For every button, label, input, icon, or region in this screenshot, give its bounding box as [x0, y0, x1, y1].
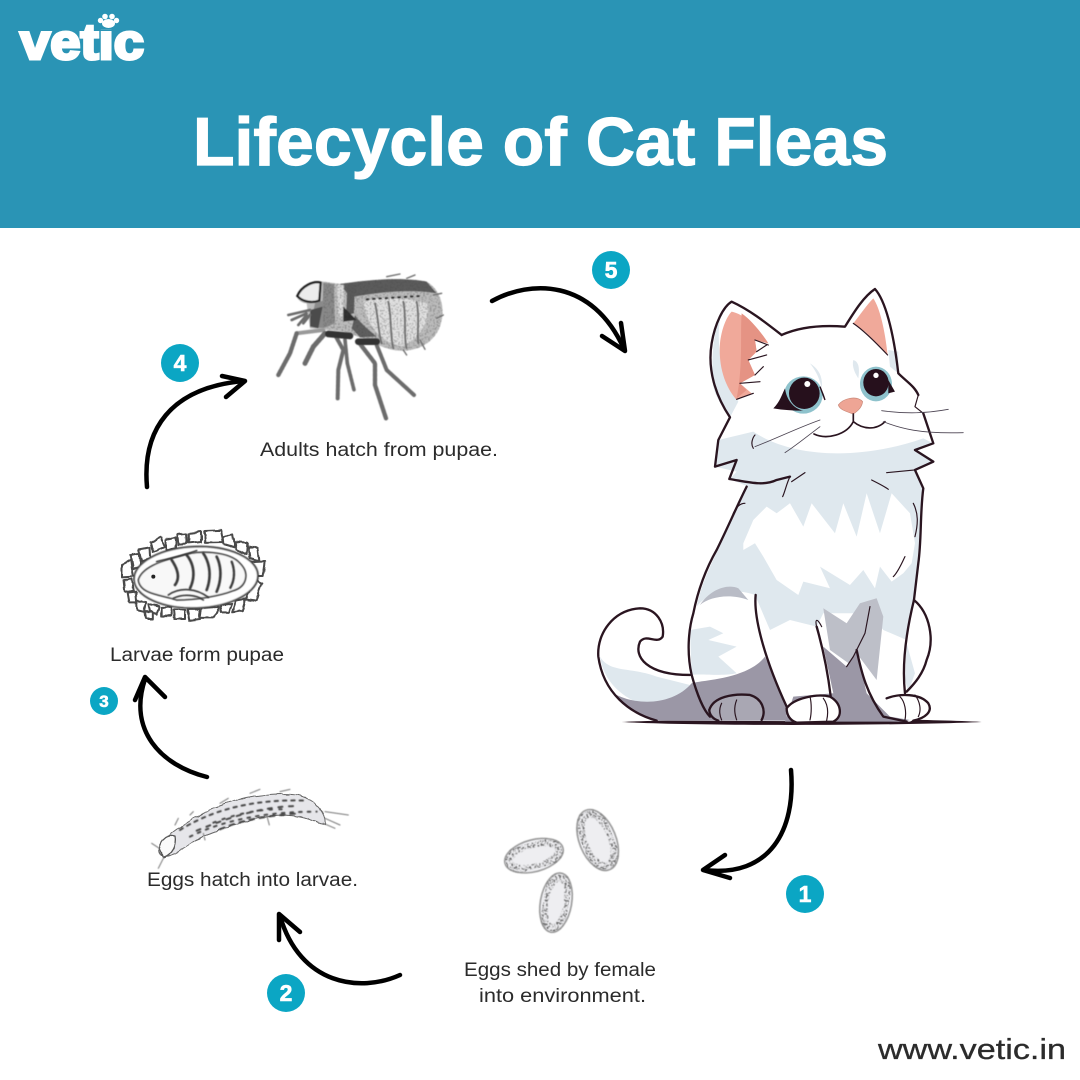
badge 5: 5 [605, 257, 618, 283]
header band [0, 0, 1080, 228]
cat front paws [787, 695, 930, 723]
icon: adult flea [278, 274, 443, 418]
arrow 5 [492, 288, 625, 351]
title: Lifecycle of Cat Fleas [193, 104, 888, 180]
arrow 2 [279, 914, 400, 983]
arrow 1 [703, 770, 792, 878]
badge 4 [161, 344, 199, 382]
cat nose and mouth [814, 398, 885, 436]
cat ground shadow [622, 719, 982, 725]
cat whiskers [755, 409, 963, 453]
cat outline [598, 289, 933, 723]
label: larvae: Eggs hatch into larvae. [147, 870, 358, 891]
flea texture [323, 279, 443, 351]
website url: www.vetic.in [877, 1034, 1066, 1066]
cat blue-grey fur shading [600, 318, 933, 705]
badge 4: 4 [174, 350, 187, 376]
label: eggs: Eggs shed by female [464, 960, 656, 981]
cat silhouette [598, 289, 933, 722]
flea legs [278, 274, 443, 418]
cat fine fur and toe lines [720, 323, 923, 721]
badge 1 [786, 875, 824, 913]
illustration: white cat [598, 289, 982, 725]
badge 3 [90, 687, 118, 715]
badge 3: 3 [99, 692, 109, 711]
label: adults: Adults hatch from pupae. [260, 440, 498, 461]
cat ear interiors [720, 298, 888, 400]
badge 1: 1 [799, 881, 812, 907]
badge 2: 2 [280, 980, 292, 1006]
arrow 4 [146, 376, 245, 487]
label: eggs: into environment. [479, 986, 646, 1007]
icon: eggs [501, 803, 627, 935]
label: pupae: Larvae form pupae [110, 645, 284, 666]
cat white chest fur [743, 493, 915, 595]
icon: pupa [122, 530, 265, 621]
cat eyes [773, 367, 895, 414]
arrow 3 [135, 677, 207, 777]
badge 2 [267, 974, 305, 1012]
cat lower grey shading [613, 587, 910, 722]
label: eggs [464, 960, 656, 1007]
badge 5 [592, 251, 630, 289]
icon: larva [152, 789, 348, 868]
logo: vetic: vetic [20, 14, 144, 70]
